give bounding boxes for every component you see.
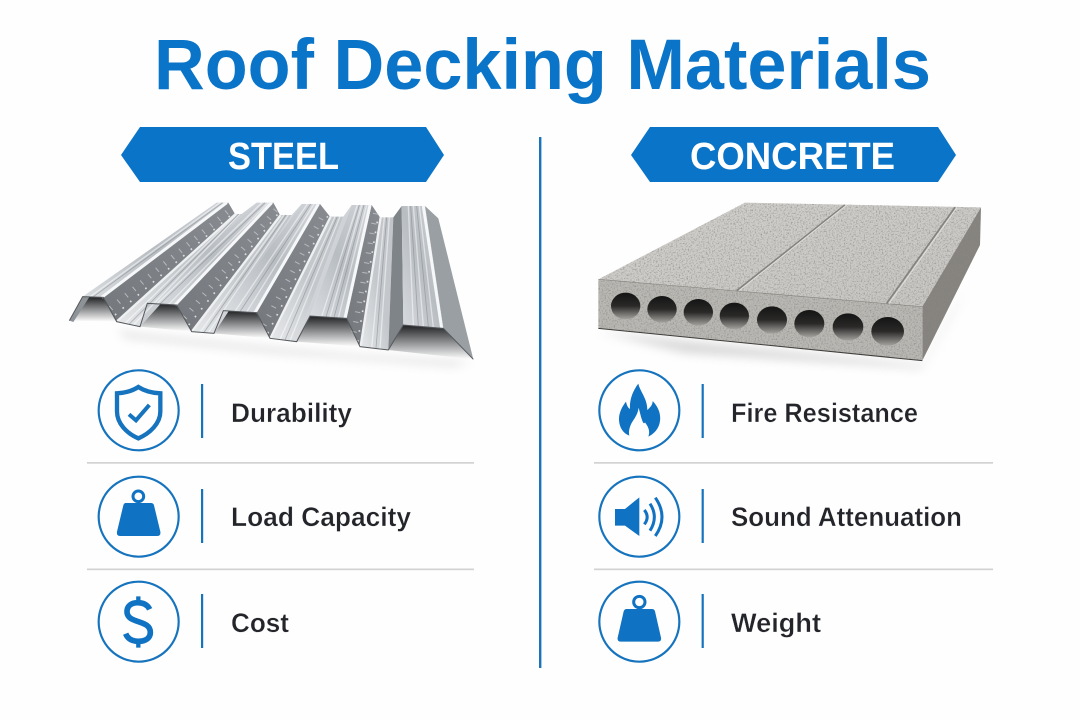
divider between columns [539, 137, 541, 668]
panel: concrete [594, 127, 993, 662]
panel: steel [69, 127, 474, 662]
icon: weight [599, 582, 679, 662]
label: Sound Attenuation [731, 502, 962, 532]
concrete banner: CONCRETE [690, 136, 895, 178]
separator [201, 594, 203, 648]
row: sound attenuation [599, 477, 962, 557]
row: fire resistance [599, 370, 918, 450]
label: Durability [231, 398, 352, 428]
icon: speaker [599, 477, 679, 557]
separator [702, 489, 704, 543]
row: load capacity [99, 477, 411, 557]
separator [201, 489, 203, 543]
steel banner: STEEL [228, 136, 339, 178]
icon: flame [599, 370, 679, 450]
separator [201, 384, 203, 438]
row: weight [599, 582, 821, 662]
row: cost [99, 582, 289, 662]
title: Roof Decking Materials [154, 26, 931, 105]
separator [702, 384, 704, 438]
steel banner [121, 127, 444, 182]
concrete banner [631, 127, 956, 182]
label: Fire Resistance [731, 398, 918, 428]
icon: weight [99, 477, 179, 557]
row: durability [99, 370, 352, 450]
label: Weight [731, 608, 821, 638]
steel decking illustration [69, 203, 473, 367]
label: Load Capacity [231, 502, 411, 532]
separator [702, 594, 704, 648]
label: Cost [231, 608, 289, 638]
icon: dollar [99, 582, 179, 662]
concrete slab illustration [598, 203, 981, 368]
icon: shield check [99, 370, 179, 450]
